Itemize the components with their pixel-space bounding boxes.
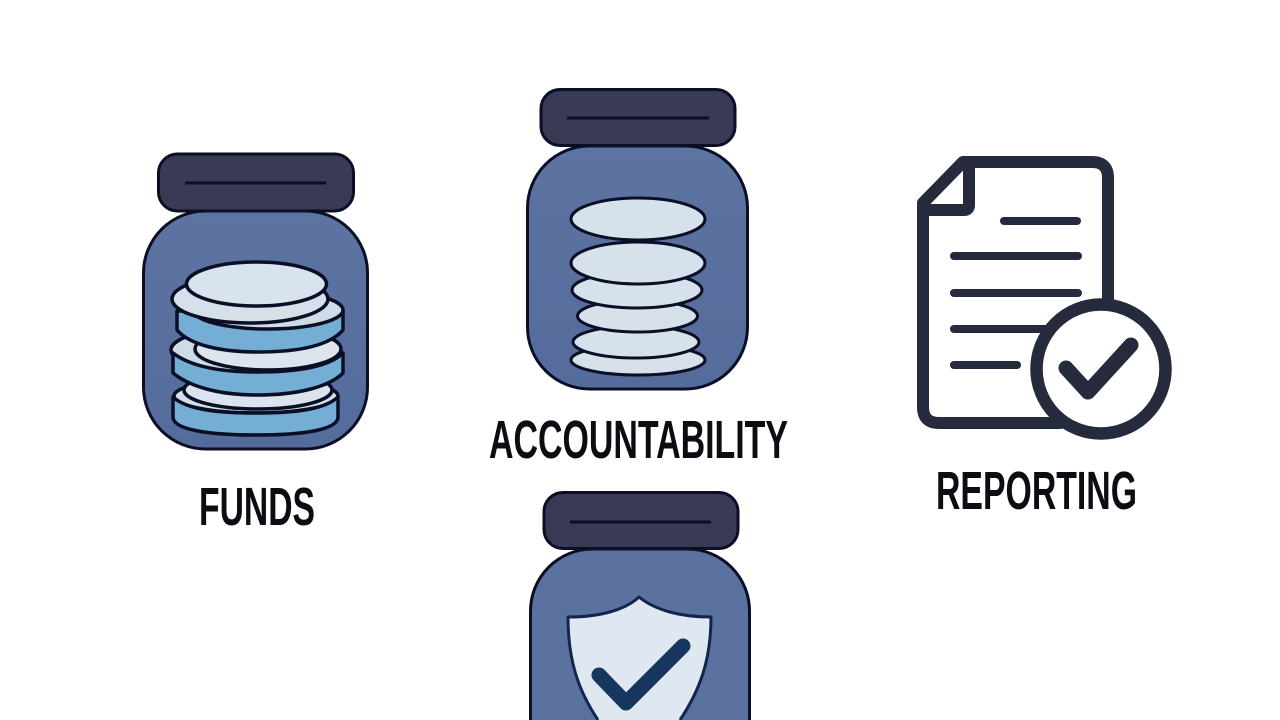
document page [923, 162, 1108, 423]
jar body [530, 549, 750, 720]
check badge [1036, 304, 1166, 434]
shield with check [568, 597, 711, 720]
document text lines [954, 221, 1078, 365]
jar body [144, 211, 368, 449]
coin stack [171, 262, 343, 435]
coin stack [571, 198, 705, 375]
label: funds: FUNDS [199, 477, 315, 537]
jar: shield [530, 492, 750, 720]
label: reporting: REPORTING [936, 461, 1137, 521]
jar: accountability [528, 90, 748, 389]
jar: funds [144, 154, 368, 449]
label: accountability: ACCOUNTABILITY [489, 410, 788, 470]
jar body [528, 146, 748, 389]
jar lid [158, 154, 354, 211]
icon: report document with check [923, 162, 1166, 434]
jar lid [541, 90, 735, 146]
jar lid [544, 492, 738, 548]
